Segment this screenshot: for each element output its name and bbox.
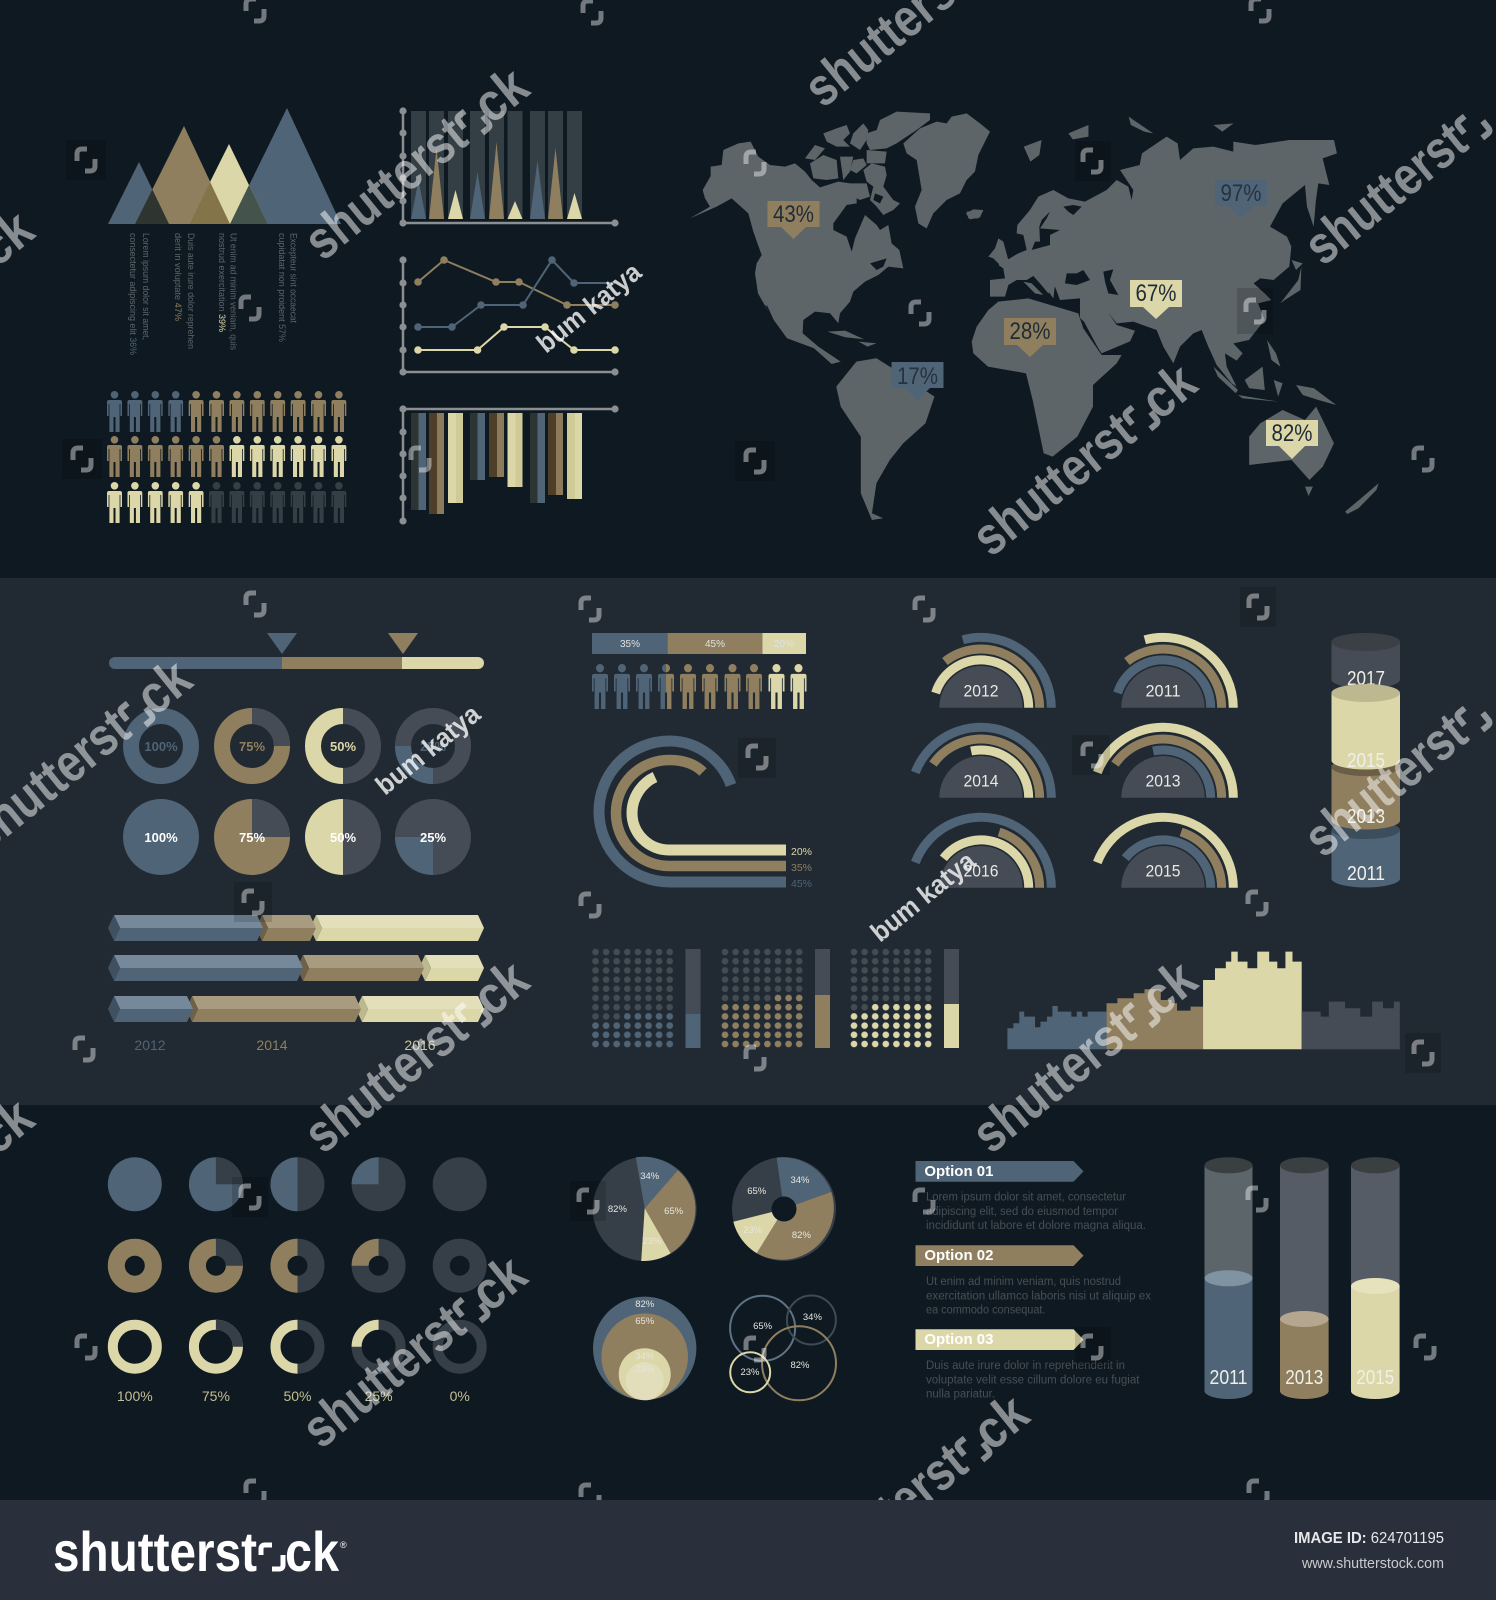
option 02 tag and text: exercitation ullamco laboris nisi ut aliquip ex <box>926 1290 1151 1302</box>
panel: bottom section background <box>0 1105 1496 1500</box>
spiral progress chart <box>599 741 812 890</box>
stacked cylinder chart: 2015 <box>1347 750 1385 772</box>
semi-donut: 2015 <box>1097 817 1233 888</box>
people row <box>592 664 806 709</box>
watermark: diagonal shutterstock marks: shutterst <box>293 105 478 271</box>
pin: 97%: 97% <box>1220 180 1262 207</box>
nested circles chart: 34% <box>635 1351 655 1362</box>
pie chart with four slices: 82% <box>608 1204 627 1215</box>
small tan donut grid <box>116 1247 478 1284</box>
stacked percent bar: 20% <box>774 639 794 650</box>
panel: top section background <box>0 0 1496 578</box>
pie charts row: 75% <box>239 830 265 845</box>
donut chart with four slices: 65% <box>747 1186 767 1197</box>
watermark: contributor name: bum katya <box>370 698 487 801</box>
nested circles chart: 23% <box>635 1364 655 1375</box>
rotated captions under mountains: Duis aute irure dolor reprehen <box>185 233 196 349</box>
percent labels for grid <box>117 1388 470 1404</box>
rotated captions under mountains: cupidatat non proident 57% <box>276 233 287 343</box>
donut chart with four slices: 82% <box>792 1230 811 1241</box>
watermark: contributor name: bum katya <box>531 256 648 359</box>
venn outline circles: 34% <box>803 1312 822 1323</box>
watermark: diagonal shutterstock marks: ck <box>461 948 540 1028</box>
rotated captions under mountains: consectetur adipiscing elit 36% <box>127 233 138 356</box>
footer image id: IMAGE ID: 624701195 <box>1294 1530 1444 1547</box>
watermark: diagonal shutterstock marks: ck <box>961 1382 1040 1462</box>
watermark: diagonal shutterstock marks: shutterst <box>291 1293 476 1459</box>
spiral progress chart: 20% <box>791 846 812 858</box>
stacked cylinder chart: 2011 <box>1347 863 1385 885</box>
pin: 17% <box>892 362 944 400</box>
option 01 tag and text: Lorem ipsum dolor sit amet, consectetur <box>926 1192 1126 1204</box>
pin: 67% <box>1130 280 1182 319</box>
dot matrix: blue <box>590 947 700 1049</box>
footer logo: shutterst <box>53 1520 257 1583</box>
option 02 tag and text: Ut enim ad minim veniam, quis nostrud <box>926 1276 1121 1288</box>
rotated captions under mountains: derit in voluptate 47% <box>172 233 183 322</box>
watermark: diagonal shutterstock marks: ck <box>1129 351 1208 431</box>
footer logo: ® <box>340 1540 347 1550</box>
donut charts row: 25% <box>420 739 446 754</box>
semi-donut: 2015: 2015 <box>1146 862 1180 881</box>
venn outline circles: 65% <box>753 1321 773 1332</box>
option 03 tag and text: Duis aute irure dolor in reprehenderit in <box>926 1360 1125 1372</box>
donut chart with four slices <box>732 1157 836 1261</box>
pin: 67%: 67% <box>1136 280 1176 307</box>
mountain triangle chart <box>108 108 341 224</box>
watermark: contributor name: bum katya <box>865 845 982 948</box>
pie charts row: 25% <box>420 830 446 845</box>
3D arrow bars <box>108 915 484 1022</box>
donut charts row: 75% <box>239 739 265 754</box>
stacked percent bar <box>592 633 806 654</box>
semi-donut: 2011: 2011 <box>1146 682 1180 701</box>
option 02 tag and text: Option 02 <box>924 1247 993 1264</box>
pie chart with four slices: 23% <box>642 1236 662 1247</box>
watermark: diagonal shutterstock marks: ck <box>124 647 203 727</box>
option 03 tag and text: Option 03 <box>924 1331 993 1348</box>
world map <box>690 112 1379 520</box>
arrow bar year labels <box>134 1037 436 1053</box>
small pie grid <box>108 1157 487 1211</box>
donut charts row: 100% <box>144 739 178 754</box>
arrow bar year labels: 2016 <box>404 1037 436 1053</box>
pie charts row: 50% <box>330 830 356 845</box>
stepped area chart <box>1007 952 1400 1049</box>
semi-donut: 2012 <box>936 637 1051 708</box>
semi-donut: 2011 <box>1118 637 1233 708</box>
chart: triangle column chart <box>399 107 619 227</box>
pin: 28% <box>1004 318 1056 357</box>
chart: line chart <box>399 256 619 376</box>
rotated captions under mountains <box>127 233 298 356</box>
pin: 28%: 28% <box>1010 318 1050 345</box>
venn outline circles: 23% <box>740 1367 760 1378</box>
rotated captions under mountains: Excepteur sint occaecat <box>288 233 298 323</box>
option 02 tag and text: ea commodo consequat. <box>926 1304 1046 1316</box>
tube 2015: 2015 <box>1356 1367 1394 1389</box>
watermark: diagonal shutterstock marks: shutterst <box>961 998 1146 1164</box>
pin: 97% <box>1215 180 1267 218</box>
timeline bar with markers <box>109 633 484 669</box>
panel: middle section background <box>0 578 1496 1105</box>
small cream ring grid <box>113 1325 482 1369</box>
option 03 tag and text <box>916 1329 1140 1400</box>
donut chart with four slices: 23% <box>743 1225 763 1236</box>
pie charts row <box>123 799 471 875</box>
dot matrix: cream <box>849 947 959 1049</box>
semi-donut: 2013: 2013 <box>1146 772 1180 791</box>
tube 2013 <box>1280 1157 1329 1399</box>
tube 2011: 2011 <box>1210 1367 1248 1389</box>
rotated captions under mountains: nostrud exercitation 39% <box>216 233 227 333</box>
donut charts row: 50% <box>330 739 356 754</box>
nested circles chart: 82% <box>635 1299 655 1310</box>
percent labels for grid: 50% <box>283 1388 312 1404</box>
pictogram: people grid <box>107 391 346 523</box>
watermark: diagonal shutterstock marks: ck <box>1129 948 1208 1028</box>
tube 2015 <box>1351 1157 1400 1399</box>
watermark: diagonal shutterstock marks: shutterst <box>793 1432 978 1598</box>
spiral progress chart: 35% <box>791 862 812 874</box>
stacked cylinder chart: 2017 <box>1347 668 1385 690</box>
semi-donut: 2013 <box>1097 727 1233 798</box>
pin: 17%: 17% <box>897 363 938 390</box>
stacked cylinder chart: 2013 <box>1347 806 1385 828</box>
pie chart with four slices <box>593 1157 697 1261</box>
percent labels for grid: 100% <box>117 1388 153 1404</box>
rotated captions under mountains: Lorem ipsum dolor sit amet, <box>140 233 151 340</box>
option 02 tag and text <box>916 1245 1151 1316</box>
semi-donut: 2016 <box>915 817 1051 888</box>
pie chart with four slices: 34% <box>640 1171 660 1182</box>
nested circles chart: 65% <box>635 1316 655 1327</box>
semi-donut: 2016: 2016 <box>964 862 998 881</box>
chart: hanging bar chart <box>399 405 619 525</box>
pie chart with four slices: 65% <box>664 1206 684 1217</box>
stacked percent bar: 45% <box>705 639 725 650</box>
pin: 82%: 82% <box>1272 420 1312 447</box>
semi-donut: 2014 <box>915 727 1051 798</box>
donut charts row <box>131 716 463 776</box>
stacked cylinder chart <box>1331 633 1400 888</box>
option 03 tag and text: nulla pariatur. <box>926 1388 995 1400</box>
watermark: contributor name <box>370 256 982 948</box>
spiral progress chart: 45% <box>791 878 812 890</box>
arrow bar year labels: 2012 <box>134 1037 166 1053</box>
venn outline circles: 82% <box>790 1360 810 1371</box>
watermark: diagonal shutterstock marks: ck <box>461 55 540 135</box>
option 01 tag and text <box>916 1161 1146 1232</box>
tube 2013: 2013 <box>1285 1367 1323 1389</box>
pie charts row: 100% <box>144 830 178 845</box>
donut chart with four slices: 34% <box>790 1175 810 1186</box>
footer logo: ck <box>285 1520 340 1583</box>
nested circles chart <box>593 1297 696 1400</box>
percent labels for grid: 75% <box>202 1388 230 1404</box>
watermark: diagonal shutterstock marks: ck <box>459 1243 538 1323</box>
footer url: www.shutterstock.com <box>1301 1556 1444 1572</box>
rotated captions under mountains: Ut enim ad minim veniam, quis <box>228 233 238 350</box>
percent labels for grid: 25% <box>365 1388 393 1404</box>
semi-donut: 2012: 2012 <box>964 682 998 701</box>
pin: 43% <box>768 201 820 239</box>
option 03 tag and text: voluptate velit esse cillum dolore eu fugiat <box>926 1374 1140 1386</box>
semi-donut: 2014: 2014 <box>964 772 998 791</box>
dot matrix: tan <box>720 947 830 1049</box>
stacked percent bar: 35% <box>620 639 640 650</box>
watermark: diagonal shutterstock marks: shutterst <box>961 401 1146 567</box>
option 01 tag and text: Option 01 <box>924 1163 993 1180</box>
footer bar <box>0 1500 1496 1600</box>
option 01 tag and text: adipiscing elit, sed do eiusmod tempor <box>926 1206 1118 1218</box>
arrow bar year labels: 2014 <box>256 1037 288 1053</box>
option 01 tag and text: incididunt ut labore et dolore magna aliqua. <box>926 1220 1146 1232</box>
pin: 43%: 43% <box>773 201 814 228</box>
pin: 82% <box>1266 420 1318 459</box>
watermark: diagonal shutterstock marks: shutterst <box>293 998 478 1164</box>
venn outline circles <box>730 1296 836 1400</box>
tube 2011 <box>1204 1157 1252 1399</box>
map pins with percentages <box>768 180 1318 459</box>
percent labels for grid: 0% <box>450 1388 470 1404</box>
